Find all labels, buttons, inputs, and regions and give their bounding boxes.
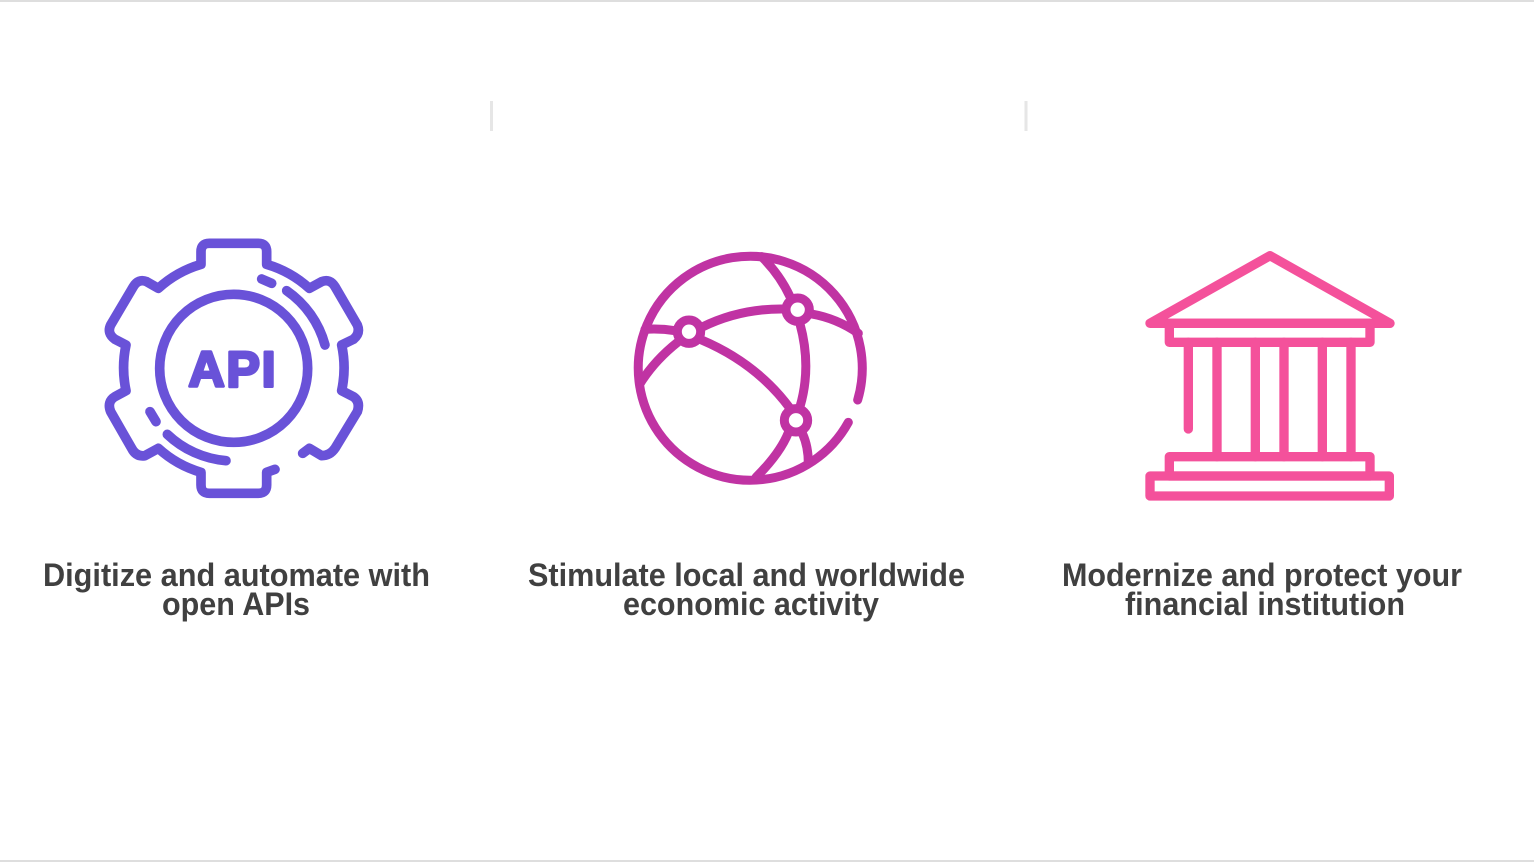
caption: digitize: open APIs [162, 586, 310, 622]
caption: digitize [43, 557, 430, 622]
icon: globe network [638, 256, 862, 480]
caption: modernize [1062, 557, 1462, 622]
caption: stimulate: economic activity [623, 586, 879, 622]
caption: digitize: Digitize and automate with [43, 557, 430, 593]
icon: bank building [1150, 256, 1390, 496]
caption: stimulate: Stimulate local and worldwide [528, 557, 965, 593]
label: API: API [188, 341, 276, 398]
caption: modernize: Modernize and protect your [1062, 557, 1462, 593]
caption: modernize: financial institution [1125, 586, 1405, 622]
icon: API gear [109, 243, 358, 493]
caption: stimulate [528, 557, 965, 622]
